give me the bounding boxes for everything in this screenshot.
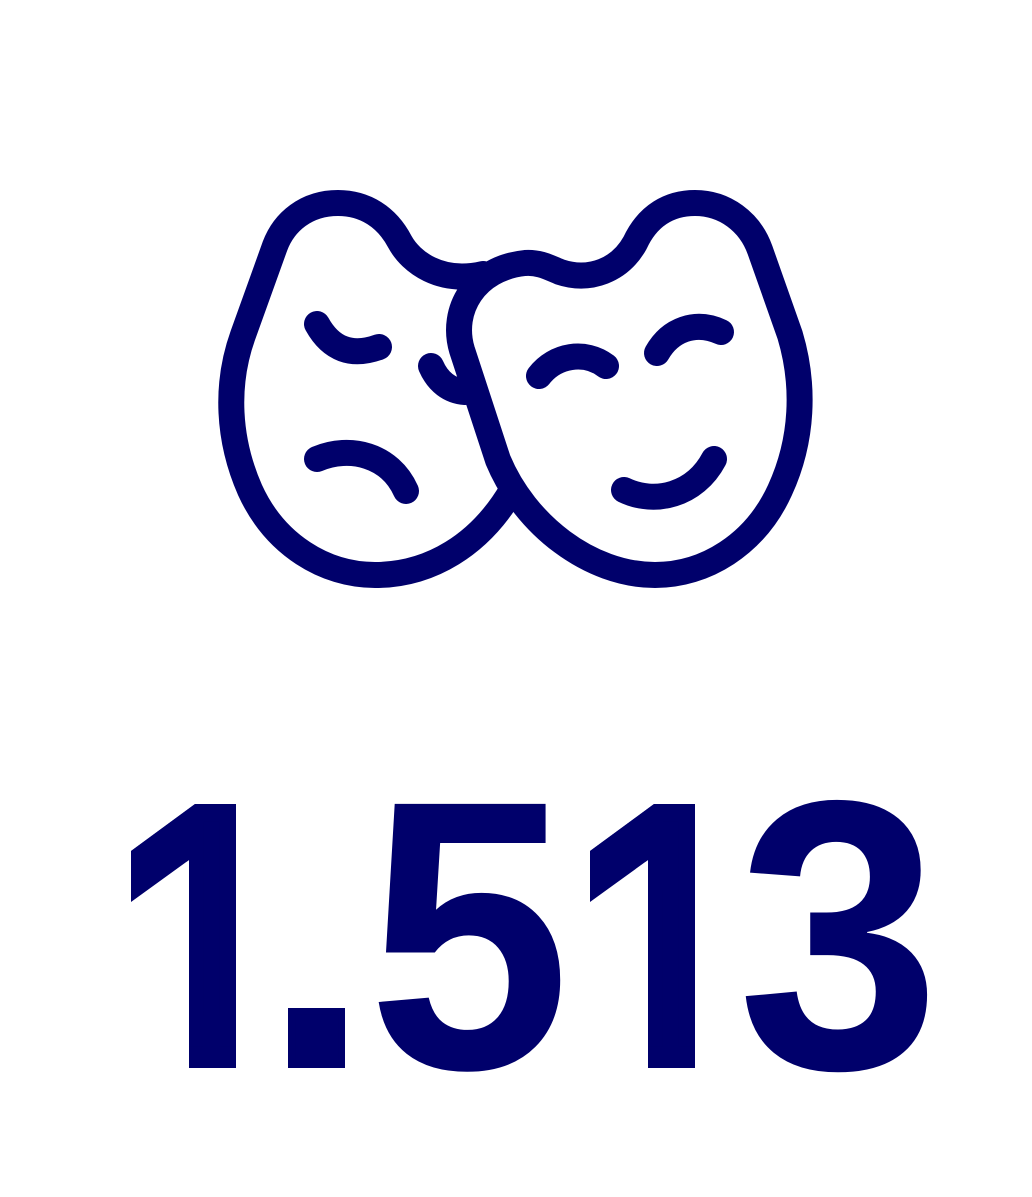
number: 1.513 bbox=[131, 800, 928, 1072]
number: 1.513: 5 bbox=[367, 721, 570, 1150]
number: 1.513: 1 bbox=[560, 721, 763, 1150]
number: 1.513: 3 bbox=[737, 721, 940, 1150]
number: 1.513: . bbox=[266, 721, 368, 1150]
sad mask bbox=[231, 203, 512, 575]
happy mask bbox=[459, 203, 800, 575]
icon: theatre masks bbox=[231, 203, 800, 575]
infographic bbox=[131, 190, 928, 1072]
number: 1.513: 1 bbox=[101, 721, 304, 1150]
